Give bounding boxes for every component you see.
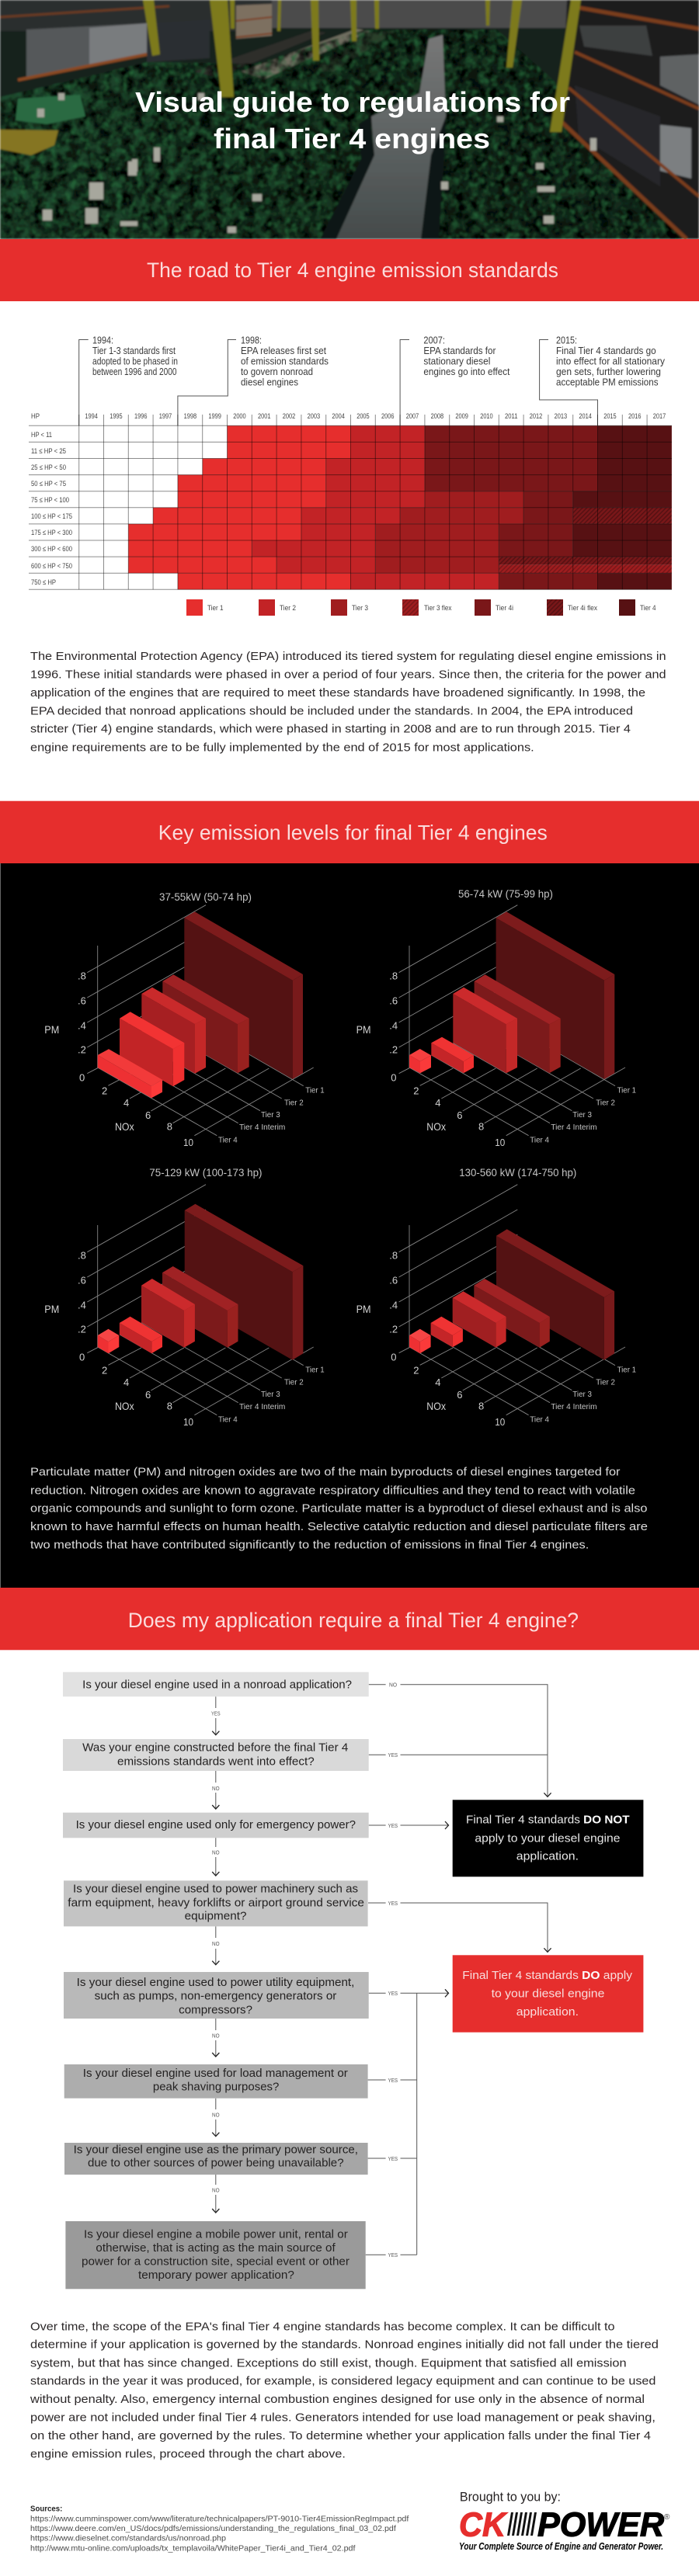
paragraph: PM and NOx explanation: Particulate matter (PM) and nitrogen oxides are two of the main byproducts of diesel engines targeted for <box>30 1467 621 1479</box>
connectors and arrows <box>211 1683 551 2258</box>
callout: 1994: between 1996 and 2000 <box>92 366 177 377</box>
chart: 37-55kW: Tier 4 <box>218 1135 238 1144</box>
chart: 130-560 kW: PM <box>356 1303 371 1315</box>
chart: 37-55kW: .8 <box>78 970 86 982</box>
legend: Tier 4i flex <box>568 604 597 613</box>
question: nonroad: Is your diesel engine used in a nonroad application? <box>82 1679 352 1691</box>
callout: 1998 <box>178 335 329 425</box>
legend <box>186 599 656 616</box>
paragraph: EPA tier history: 1996. These initial standards were phased in over a period of four years. Since then, the criteria for the power and <box>30 668 666 681</box>
callout: 1998: to govern nonroad <box>241 366 313 377</box>
connectors and arrows: YES <box>211 1711 221 1717</box>
callout: 1994 <box>79 335 178 425</box>
panel: header photo with title <box>0 0 699 239</box>
chart: 130-560 kW: .2 <box>389 1324 398 1335</box>
chart: 75-129 kW <box>44 1166 325 1428</box>
chart: 75-129 kW: .6 <box>78 1275 86 1286</box>
result: does not apply: application. <box>516 1850 579 1863</box>
paragraph: scope of standards: standards in the year it was produced, for example, is considered legacy equipment and can continue to be used <box>30 2376 656 2388</box>
year axis labels: 1999 <box>208 412 221 420</box>
chart: 75-129 kW: 10 <box>183 1416 193 1428</box>
year axis labels: 2013 <box>555 412 567 420</box>
chart: 75-129 kW: 6 <box>145 1389 151 1401</box>
logo: CK Power: CK <box>459 2506 508 2543</box>
HP row labels: 175 ≤ HP < 300 <box>31 529 72 537</box>
chart: 56-74 kW: 4 <box>435 1097 441 1109</box>
question: constructed before: Was your engine constructed before the final Tier 4 <box>82 1742 348 1755</box>
chart: 37-55kW: .2 <box>78 1044 86 1056</box>
question: emergency power <box>63 1813 369 1838</box>
chart: 56-74 kW: 10 <box>495 1137 505 1148</box>
chart: 130-560 kW: 4 <box>435 1377 441 1388</box>
connectors and arrows: NO <box>212 1786 220 1792</box>
legend: Tier 4i <box>496 604 513 613</box>
chart: 130-560 kW: 130-560 kW (174-750 hp) <box>459 1166 576 1179</box>
heading band: key emission levels: Key emission levels for final Tier 4 engines <box>158 821 548 845</box>
question: utility equipment: such as pumps, non-emergency generators or <box>95 1991 337 2003</box>
connectors and arrows: YES <box>388 2157 398 2162</box>
chart: 130-560 kW: .8 <box>389 1250 398 1262</box>
connectors and arrows: YES <box>388 1991 398 1997</box>
chart: 75-129 kW: Tier 2 <box>284 1378 304 1387</box>
year axis labels: 2000 <box>233 412 246 420</box>
chart: 56-74 kW: 0 <box>391 1072 397 1084</box>
result: does apply: application. <box>516 2005 579 2019</box>
callout: 2007: 2007: <box>423 335 445 346</box>
chart: 130-560 kW: .4 <box>389 1299 398 1311</box>
question: mobile power unit: otherwise, that is acting as the main source of <box>96 2242 336 2255</box>
paragraph: scope of standards <box>30 2321 659 2460</box>
chart: 37-55kW: 10 <box>183 1137 193 1148</box>
paragraph: scope of standards: on the other hand, are governed by the rules. To determine whether your application falls under the final Tier 4 <box>30 2430 651 2442</box>
connectors and arrows: NO <box>212 2034 220 2039</box>
panel: flowchart <box>63 1672 643 2289</box>
paragraph: scope of standards: system, but that has since changed. Exceptions do still exist, though. Equipment that satisfied all emission <box>30 2357 627 2369</box>
question: constructed before <box>63 1739 369 1771</box>
heading band: does my application require: Does my application require a final Tier 4 engine? <box>128 1609 579 1632</box>
chart: 37-55kW: Tier 2 <box>284 1099 304 1108</box>
question: load management: Is your diesel engine used for load management or <box>83 2067 348 2080</box>
chart: 75-129 kW: 2 <box>102 1364 107 1376</box>
chart: 56-74 kW: Tier 2 <box>596 1099 615 1108</box>
question: machinery: equipment? <box>185 1911 247 1923</box>
result: does apply: Final Tier 4 standards DO apply <box>462 1969 633 1982</box>
credit: brought to you by: Brought to you by: <box>460 2490 561 2505</box>
legend: Tier 3 <box>352 604 368 613</box>
question: mobile power unit: Is your diesel engine a mobile power unit, rental or <box>84 2228 348 2241</box>
year axis labels: 1998 <box>184 412 196 420</box>
connectors and arrows: YES <box>388 1824 398 1829</box>
logo: CK Power: POWER <box>537 2506 664 2543</box>
HP row labels: HP <box>31 412 40 421</box>
chart: 37-55kW: 8 <box>167 1121 172 1133</box>
sources: https://www.dieselnet.com/standards/us/nonroad.php <box>30 2534 226 2543</box>
HP row labels: 600 ≤ HP < 750 <box>31 562 72 571</box>
HP row labels: 25 ≤ HP < 50 <box>31 463 66 472</box>
chart: 75-129 kW: 0 <box>79 1352 85 1363</box>
chart: 56-74 kW <box>356 887 636 1148</box>
chart: 37-55kW: 6 <box>145 1109 151 1121</box>
chart: 130-560 kW: 8 <box>478 1401 484 1412</box>
chart: 75-129 kW: NOx <box>115 1400 134 1412</box>
question: load management <box>64 2064 368 2099</box>
chart: 56-74 kW: .2 <box>389 1044 398 1056</box>
paragraph: EPA tier history: stricter (Tier 4) engine standards, which were phased in starting in 2008 and are to run through 2015. Tier 4 <box>30 724 631 736</box>
chart: 37-55kW: 4 <box>123 1097 129 1109</box>
HP row labels <box>31 412 72 587</box>
question: load management: peak shaving purposes? <box>153 2081 279 2094</box>
callout: 2015: gen sets, further lowering <box>556 366 661 377</box>
paragraph: EPA tier history: engine requirements are to be fully implemented by the end of 2015 for most applications. <box>30 741 534 754</box>
result: does not apply: apply to your diesel engine <box>475 1831 620 1845</box>
year axis labels: 2014 <box>579 412 592 420</box>
chart: 37-55kW: .4 <box>78 1019 86 1031</box>
HP row labels: 100 ≤ HP < 175 <box>31 512 72 521</box>
chart: 130-560 kW: 6 <box>457 1389 463 1401</box>
chart: 56-74 kW: 56-74 kW (75-99 hp) <box>458 887 553 900</box>
paragraph: scope of standards: power are not included under final Tier 4 rules. Generators intended for use load management or peak shaving, <box>30 2412 656 2425</box>
HP row labels: HP < 11 <box>31 431 52 439</box>
sources: https://www.deere.com/en_US/docs/pdfs/emissions/understanding_the_regulations_final_03_02.pdf <box>30 2524 396 2533</box>
question: utility equipment: Is your diesel engine used to power utility equipment, <box>77 1977 354 1989</box>
connectors and arrows: YES <box>388 2253 398 2258</box>
HP row labels: 11 ≤ HP < 25 <box>31 447 66 456</box>
panel: black emission charts <box>0 863 699 1588</box>
question: utility equipment: compressors? <box>179 2004 252 2016</box>
legend: Tier 3 flex <box>424 604 452 613</box>
paragraph: PM and NOx explanation: two methods that have contributed significantly to the reduction of emissions in final Tier 4 engines. <box>30 1539 589 1551</box>
result: does not apply <box>453 1800 643 1876</box>
paragraph: scope of standards: without penalty. Also, emergency internal combustion engines designed for use only in the absence of normal <box>30 2394 645 2406</box>
callout: 2015: 2015: <box>556 335 577 346</box>
paragraph: EPA tier history: EPA decided that nonroad applications should be included under the standards. In 2004, the EPA introduced <box>30 705 633 717</box>
paragraph: PM and NOx explanation: organic compounds and sunlight to form ozone. Particulate matter is a byproduct of diesel exhaust and is also <box>30 1503 648 1515</box>
chart: 130-560 kW: 0 <box>391 1352 397 1363</box>
chart: 130-560 kW: 2 <box>413 1364 419 1376</box>
callout: 1998: 1998: <box>241 335 262 346</box>
HP row labels: 300 ≤ HP < 600 <box>31 545 72 554</box>
year axis labels: 2017 <box>653 412 666 420</box>
chart: 75-129 kW: .8 <box>78 1250 86 1262</box>
callout: 1994: Tier 1-3 standards first <box>92 345 176 356</box>
chart: 75-129 kW: .4 <box>78 1299 86 1311</box>
chart: 56-74 kW: NOx <box>426 1120 446 1133</box>
chart: 56-74 kW: Tier 4 Interim <box>551 1123 597 1132</box>
chart: 130-560 kW: .6 <box>389 1275 398 1286</box>
year axis labels: 2008 <box>431 412 443 420</box>
chart: 75-129 kW: 8 <box>167 1401 172 1412</box>
callout: 2007: stationary diesel <box>423 356 490 367</box>
chart: 75-129 kW: PM <box>44 1303 59 1315</box>
year axis labels: 2001 <box>258 412 270 420</box>
chart: 37-55kW: 0 <box>79 1072 85 1084</box>
sources: http://www.mtu-online.com/uploads/tx_templavoila/WhitePaper_Tier4i_and_Tier4_02.pdf <box>30 2543 356 2553</box>
callout: 1998: EPA releases first set <box>241 345 326 356</box>
connectors and arrows: YES <box>388 1753 398 1758</box>
callout: 2007: EPA standards for <box>423 345 496 356</box>
chart: 56-74 kW: Tier 3 <box>572 1110 592 1120</box>
year axis labels: 2002 <box>283 412 295 420</box>
result: does apply: to your diesel engine <box>492 1988 604 2001</box>
callout: 1998: of emission standards <box>241 356 329 367</box>
title: Visual guide to regulations for <box>135 86 570 118</box>
connectors and arrows: NO <box>212 1851 220 1856</box>
chart: 75-129 kW: Tier 4 Interim <box>239 1402 286 1411</box>
question: primary power source <box>64 2143 368 2175</box>
year axis labels: 2004 <box>332 412 345 420</box>
chart: 37-55kW <box>44 890 325 1148</box>
chart: 130-560 kW: Tier 2 <box>596 1378 615 1387</box>
chart: 37-55kW: Tier 4 Interim <box>239 1123 286 1132</box>
chart: 37-55kW: NOx <box>115 1120 134 1133</box>
chart: 130-560 kW: NOx <box>426 1400 446 1412</box>
paragraph: scope of standards: engine emission rules, proceed through the chart above. <box>30 2448 346 2460</box>
year axis labels: 1996 <box>134 412 148 420</box>
year axis labels: 2016 <box>628 412 642 420</box>
paragraph: scope of standards: determine if your application is governed by the standards. Nonroad engines initially did not fall under the tiered <box>30 2339 659 2352</box>
tier grid <box>29 415 672 589</box>
result: does not apply: Final Tier 4 standards DO NOT <box>466 1814 630 1827</box>
chart: 56-74 kW: Tier 4 <box>530 1135 549 1144</box>
sources: Sources: <box>30 2505 62 2514</box>
chart: 130-560 kW: Tier 4 <box>530 1415 549 1424</box>
paragraph: PM and NOx explanation <box>30 1467 648 1551</box>
year axis labels: 2012 <box>530 412 542 420</box>
chart: 75-129 kW: .2 <box>78 1324 86 1335</box>
question: mobile power unit: power for a construction site, special event or other <box>82 2256 350 2269</box>
question: mobile power unit: temporary power application? <box>138 2269 294 2282</box>
question: machinery: Is your diesel engine used to power machinery such as <box>73 1883 358 1896</box>
HP row labels: 50 ≤ HP < 75 <box>31 480 66 488</box>
callout: 2007 <box>400 335 510 425</box>
connectors and arrows: YES <box>388 2078 398 2084</box>
chart: 130-560 kW: Tier 4 Interim <box>551 1402 597 1411</box>
warehouse photo background <box>0 0 699 239</box>
year axis labels: 2010 <box>480 412 493 420</box>
connectors and arrows: YES <box>388 1901 398 1907</box>
chart: 56-74 kW: Tier 1 <box>617 1085 636 1095</box>
question: nonroad <box>63 1672 369 1696</box>
heading band: road to Tier 4 <box>0 239 699 301</box>
chart: 56-74 kW: .8 <box>389 970 398 982</box>
chart: 37-55kW: 2 <box>102 1085 107 1096</box>
title <box>135 86 570 154</box>
credit: brought to you by <box>459 2490 670 2552</box>
chart: 37-55kW: Tier 1 <box>305 1085 325 1095</box>
question: utility equipment <box>64 1972 369 2019</box>
heading band: key emission levels <box>0 801 699 863</box>
logo: CK Power <box>459 2506 670 2552</box>
callout: 1994: adopted to be phased in <box>92 356 178 367</box>
result: does apply <box>453 1955 643 2033</box>
chart: 56-74 kW: 2 <box>413 1085 419 1096</box>
year axis labels: 2009 <box>455 412 468 420</box>
chart: 56-74 kW: PM <box>356 1023 371 1036</box>
paragraph: EPA tier history <box>30 651 666 754</box>
connectors and arrows: NO <box>212 2188 220 2194</box>
chart: 37-55kW: PM <box>44 1023 59 1036</box>
chart: 75-129 kW: Tier 3 <box>261 1390 280 1399</box>
legend: Tier 2 <box>280 604 296 613</box>
connectors and arrows: NO <box>212 1942 220 1947</box>
question: primary power source: Is your diesel engine use as the primary power source, <box>74 2144 358 2156</box>
chart: 130-560 kW: Tier 3 <box>572 1390 592 1399</box>
legend: Tier 1 <box>207 604 224 613</box>
legend: Tier 4 <box>640 604 656 613</box>
paragraph: EPA tier history: application of the engines that are required to meet these standards have broadened significantly. In 1998, the <box>30 687 645 700</box>
chart: 75-129 kW: Tier 1 <box>305 1365 325 1374</box>
year axis labels: 1995 <box>110 412 123 420</box>
question: primary power source: due to other sources of power being unavailable? <box>88 2158 344 2170</box>
chart: 75-129 kW: 4 <box>123 1377 129 1388</box>
year axis labels: 2007 <box>406 412 419 420</box>
year axis labels: 2003 <box>308 412 320 420</box>
chart: 56-74 kW: 6 <box>457 1109 463 1121</box>
year axis labels: 2005 <box>356 412 370 420</box>
paragraph: PM and NOx explanation: known to have harmful effects on human health. Selective catalytic reduction and diesel particulate filters are <box>30 1521 648 1533</box>
chart: 75-129 kW: Tier 4 <box>218 1415 238 1424</box>
callout: 2015: into effect for all stationary <box>556 356 666 367</box>
chart: 37-55kW: 37-55kW (50-74 hp) <box>159 890 252 903</box>
question: machinery <box>64 1880 368 1926</box>
chart: 37-55kW: Tier 3 <box>261 1110 280 1120</box>
HP row labels: 75 ≤ HP < 100 <box>31 496 69 505</box>
question: constructed before: emissions standards went into effect? <box>117 1755 315 1768</box>
paragraph: EPA tier history: The Environmental Protection Agency (EPA) introduced its tiered system for regulating diesel engine emissions in <box>30 651 666 663</box>
title: final Tier 4 engines <box>214 123 490 154</box>
year axis labels: 2011 <box>505 412 517 420</box>
callout: 2015: Final Tier 4 standards go <box>556 345 656 356</box>
callout: 1998: diesel engines <box>241 377 298 388</box>
chart: 130-560 kW <box>356 1166 636 1428</box>
chart: 37-55kW: .6 <box>78 995 86 1007</box>
sources: https://www.cumminspower.com/www/literature/technicalpapers/PT-9010-Tier4EmissionRegImpact.pdf <box>30 2514 409 2523</box>
paragraph: PM and NOx explanation: reduction. Nitrogen oxides are known to aggravate respiratory difficulties and they tend to react with volatile <box>30 1484 635 1497</box>
chart: 130-560 kW: Tier 1 <box>617 1365 636 1374</box>
chart: 56-74 kW: .4 <box>389 1019 398 1031</box>
callout: 1994: 1994: <box>92 335 113 346</box>
year axis labels: 2015 <box>603 412 617 420</box>
year axis labels: 1997 <box>159 412 172 420</box>
paragraph: scope of standards: Over time, the scope of the EPA's final Tier 4 engine standards has become complex. It can be difficult to <box>30 2321 615 2333</box>
callout: 2015 <box>540 335 666 425</box>
chart: 56-74 kW: 8 <box>478 1121 484 1133</box>
heading band: road to Tier 4: The road to Tier 4 engine emission standards <box>147 259 558 282</box>
year axis labels: 1994 <box>85 412 98 420</box>
question: emergency power: Is your diesel engine used only for emergency power? <box>76 1819 356 1831</box>
question: machinery: farm equipment, heavy forklifts or airport ground service <box>68 1897 364 1909</box>
connectors and arrows: NO <box>389 1683 398 1688</box>
chart: 56-74 kW: .6 <box>389 995 398 1007</box>
year axis labels <box>85 412 666 420</box>
callout: 2015: acceptable PM emissions <box>556 377 659 388</box>
callout: 2007: engines go into effect <box>423 366 510 377</box>
question: mobile power unit <box>65 2221 366 2289</box>
chart: 75-129 kW: 75-129 kW (100-173 hp) <box>149 1166 263 1179</box>
panel: timeline chart <box>29 335 672 616</box>
sources <box>30 2505 409 2553</box>
chart: 130-560 kW: 10 <box>495 1416 505 1428</box>
heading band: does my application require <box>0 1588 699 1650</box>
HP row labels: 750 ≤ HP <box>31 578 56 587</box>
logo: CK Power: ® <box>664 2513 670 2522</box>
year axis labels: 2006 <box>381 412 395 420</box>
connectors and arrows: NO <box>212 2113 220 2118</box>
